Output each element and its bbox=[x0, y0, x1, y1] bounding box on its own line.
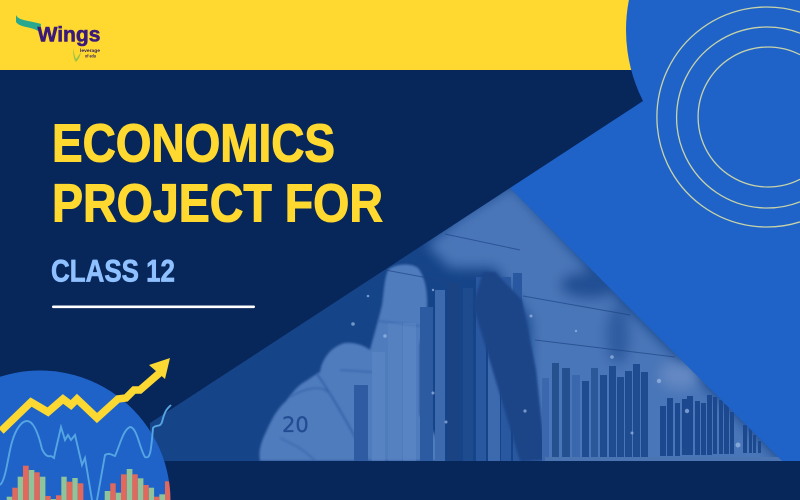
light specks bbox=[351, 289, 740, 448]
bottom navy band bbox=[0, 461, 800, 500]
yellow header band bbox=[0, 0, 660, 70]
shirt light area bbox=[427, 185, 790, 470]
blue corner shape bbox=[510, 0, 800, 461]
lower left chart circle bbox=[0, 358, 171, 500]
logo leaf bbox=[73, 48, 81, 62]
underline bbox=[52, 306, 255, 308]
arrow head bbox=[149, 358, 170, 379]
logo swoosh bbox=[16, 15, 41, 32]
title: PROJECT FOR bbox=[52, 174, 383, 234]
photo: hand and bar chart bbox=[150, 180, 790, 470]
bar chart bbox=[7, 466, 170, 500]
hand bbox=[259, 264, 440, 461]
photo number: 20 bbox=[282, 413, 309, 437]
photo base strip bbox=[545, 457, 782, 461]
title: ECONOMICS bbox=[52, 114, 335, 174]
chart grid lines bbox=[385, 234, 675, 357]
dark sash bbox=[473, 272, 546, 461]
tall bars bbox=[354, 273, 522, 461]
logo wordmark: Wings bbox=[38, 22, 101, 46]
logo: Wings leverage edu: of edu bbox=[85, 54, 96, 60]
finger creases bbox=[280, 321, 420, 461]
subtitle: CLASS 12 bbox=[51, 252, 175, 288]
small bars bbox=[660, 395, 761, 456]
medium bars bbox=[542, 363, 648, 461]
logo: Wings leverage edu bbox=[16, 15, 101, 62]
concentric rings bbox=[657, 7, 800, 227]
yellow growth arrow bbox=[1, 370, 163, 431]
logo tagline: leverage bbox=[80, 48, 100, 54]
line chart bbox=[0, 405, 171, 500]
title bbox=[52, 114, 383, 234]
